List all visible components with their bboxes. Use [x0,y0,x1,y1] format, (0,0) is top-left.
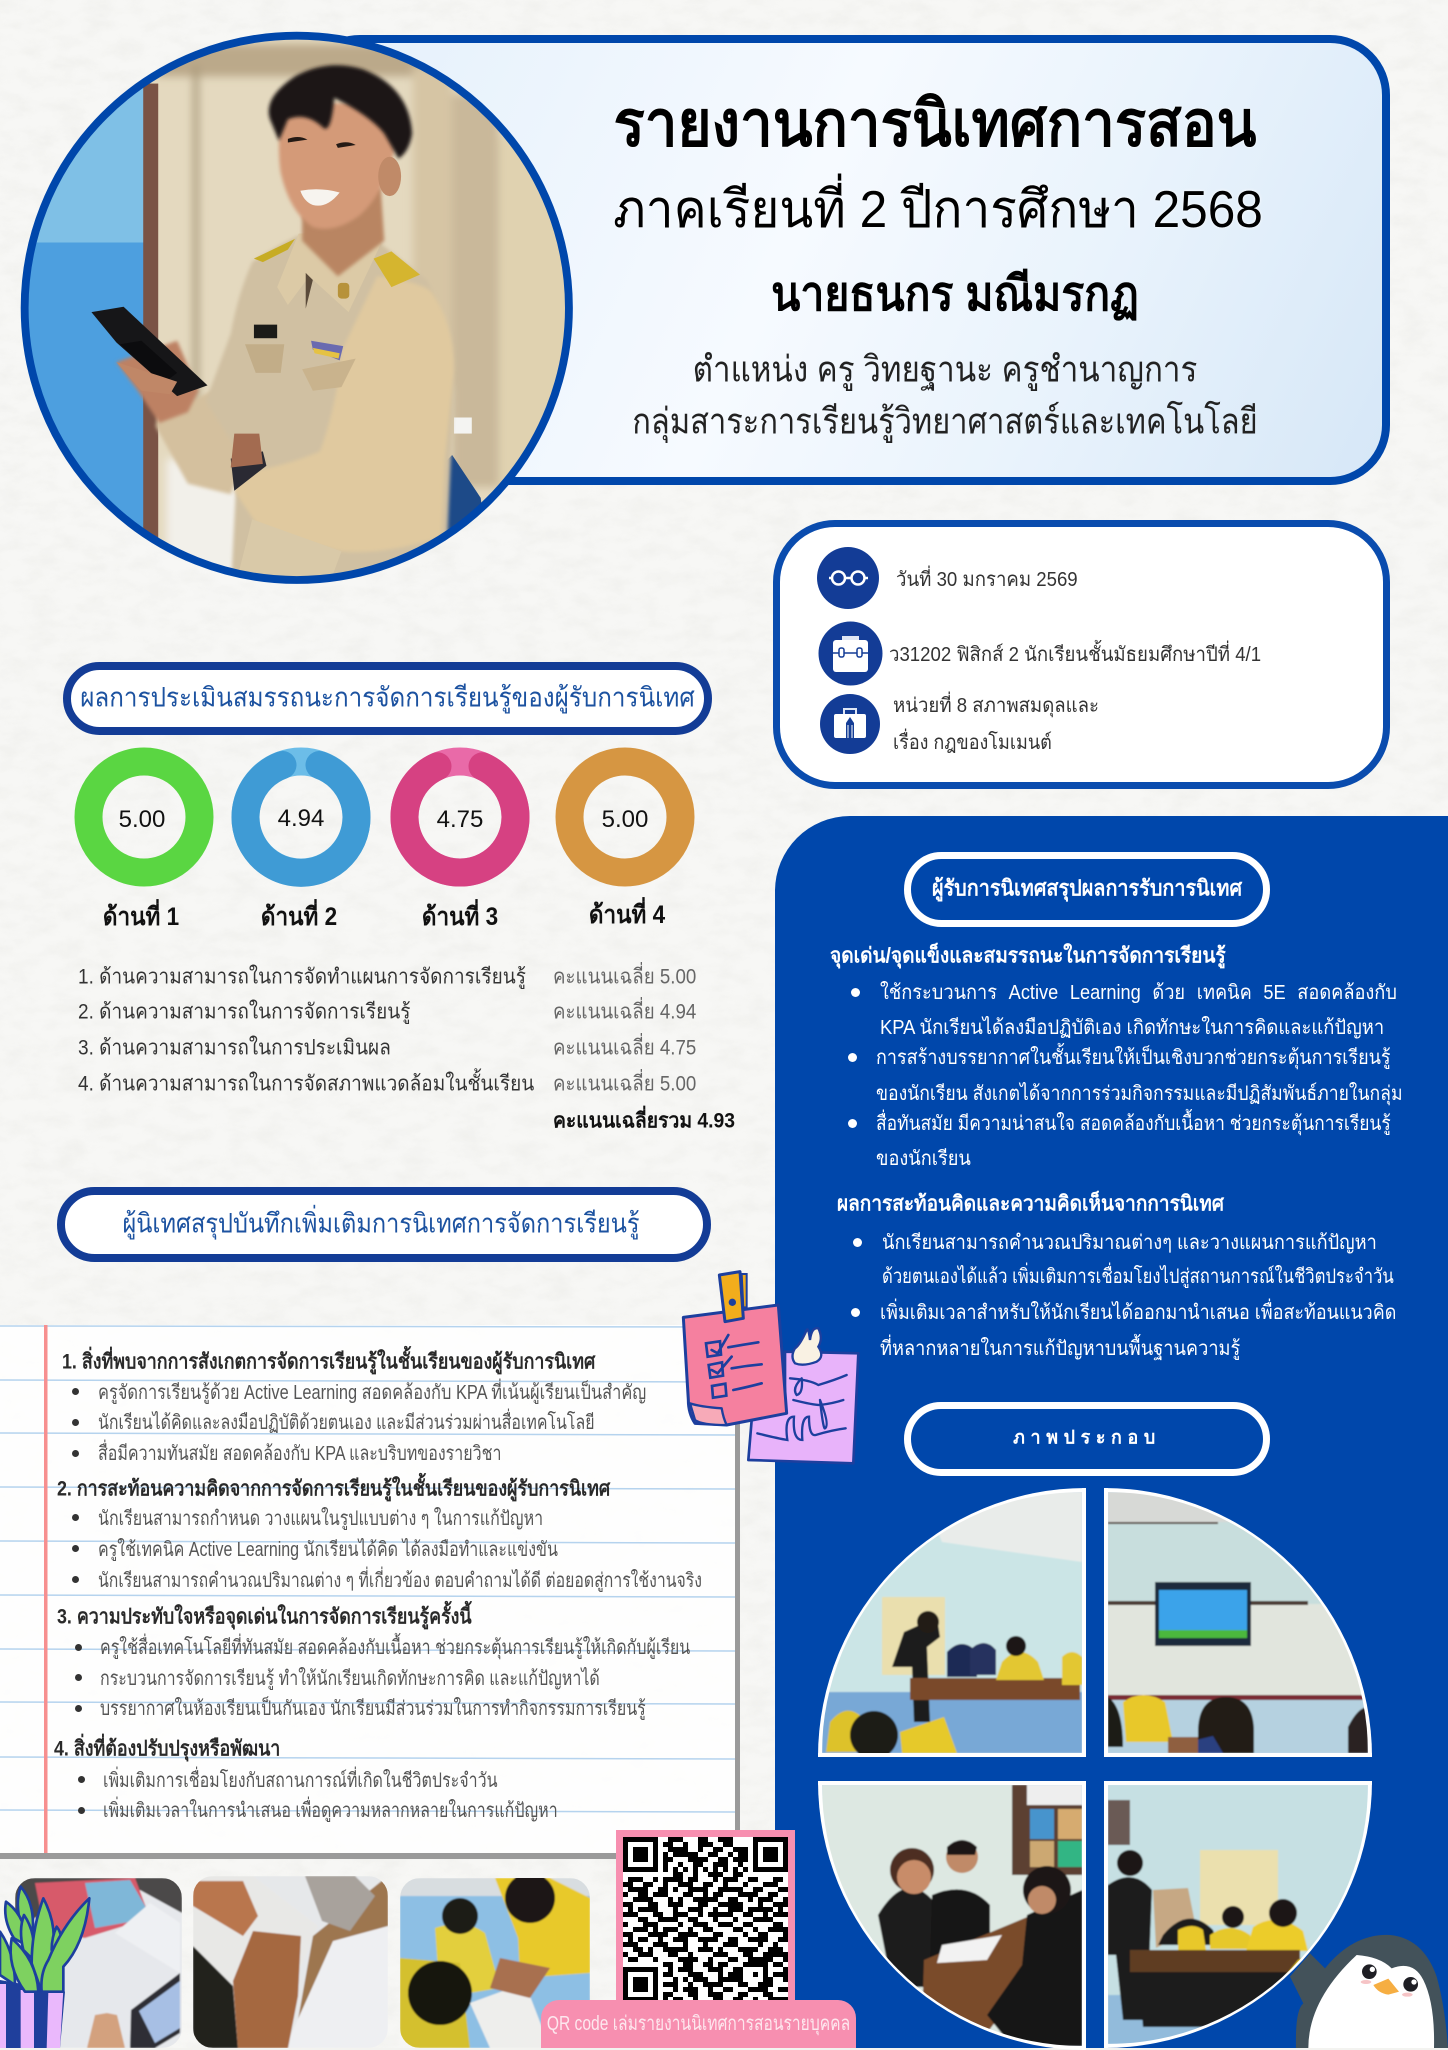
strengths heading: จุดเด่น/จุดแข็งและสมรรถนะในการจัดการเรียนรู้ [830,944,1226,967]
hair [269,65,412,159]
donut label 3: ด้านที่ 3 [422,903,498,931]
section: strengths: KPA นักเรียนได้ลงมือปฏิบัติเอง เกิดทักษะในการคิดและแก้ปัญหา [880,1017,1384,1039]
panel: notebook: นักเรียนสามารถกำหนด วางแผนในรูปแบบต่าง ๆ ในการแก้ปัญหา [98,1508,543,1530]
score list: 2. ด้านความสามารถในการจัดการเรียนรู้ [78,1000,410,1023]
section: reflection: ด้วยตนเองได้แล้ว เพิ่มเติมการเชื่อมโยงไปสู่สถานการณ์ในชีวิตประจำวัน [882,1266,1394,1288]
info: date: วันที่ 30 มกราคม 2569 [896,569,1078,591]
pink note [683,1305,787,1425]
score list: คะแนนเฉลี่ย 5.00 [553,1072,696,1095]
photo: student writing [193,1876,388,2048]
donut charts: 5.00 [602,806,648,833]
icon: penguin [1280,1920,1448,2048]
heading: supervisor notes: ผู้นิเทศสรุปบันทึกเพิ่มเติมการนิเทศการจัดการเรียนรู้ [122,1208,640,1238]
donut charts [74,748,694,887]
score list: 4. ด้านความสามารถในการจัดสภาพแวดล้อมในชั้นเรียน [78,1072,534,1095]
teacher department: กลุ่มสาระการเรียนรู้วิทยาศาสตร์และเทคโนโลยี [632,401,1258,442]
teacher name: นายธนกร มณีมรกฏ [771,268,1139,321]
QR caption: QR code เล่มรายงานนิเทศการสอนรายบุคคล [547,2013,850,2035]
section: strengths: ของนักเรียน สังเกตได้จากการร่วมกิจกรรมและมีปฏิสัมพันธ์ภายในกลุ่ม [876,1083,1403,1105]
neck [302,187,384,276]
heading: competency evaluation [63,662,712,735]
icon: briefcase [818,622,882,686]
collar [277,230,381,312]
QR caption [541,2000,856,2048]
photo: worksheet and phone [15,1878,182,2048]
score list: คะแนนเฉลี่ยรวม 4.93 [553,1109,735,1132]
hand and phone [116,341,199,423]
score list: 3. ด้านความสามารถในการประเมินผล [78,1036,391,1059]
score list: 1. ด้านความสามารถในการจัดทำแผนการจัดการเรียนรู้ [78,965,526,988]
section: strengths [820,940,1420,1180]
info: course: ว31202 ฟิสิกส์ 2 นักเรียนชั้นมัธยมศึกษาปีที่ 4/1 [889,644,1261,666]
panel: notebook: ครูใช้เทคนิค Active Learning นักเรียนได้คิด ได้ลงมือทำและแข่งขัน [98,1539,558,1561]
section: reflection: ที่หลากหลายในการแก้ปัญหาบนพื้นฐานความรู้ [880,1338,1240,1360]
heading: competency evaluation: ผลการประเมินสมรรถนะการจัดการเรียนรู้ของผู้รับการนิเทศ [80,682,695,712]
section: reflection: นักเรียนสามารถคำนวณปริมาณต่างๆ และวางแผนการแก้ปัญหา [882,1232,1377,1254]
heading: illustrations [904,1402,1270,1476]
section: strengths: ของนักเรียน [876,1148,971,1170]
teacher position: ตำแหน่ง ครู วิทยฐานะ ครูชำนาญการ [693,349,1197,390]
photo: classroom desks [818,1488,1086,1757]
score list: คะแนนเฉลี่ย 5.00 [553,965,696,988]
notes section 1: 1. สิ่งที่พบจากการสังเกตการจัดการเรียนรู้ในชั้นเรียนของผู้รับการนิเทศ [62,1350,595,1373]
notes section 4: 4. สิ่งที่ต้องปรับปรุงหรือพัฒนา [54,1737,280,1760]
donut label 4: ด้านที่ 4 [589,901,665,929]
photo: classroom screen [1104,1488,1372,1757]
score list [78,962,735,1132]
donut label 2: ด้านที่ 2 [261,903,337,931]
info: topic: เรื่อง กฎของโมเมนต์ [893,732,1052,754]
panel: notebook [0,1325,740,1859]
portrait photo [20,32,573,584]
title: รายงานการนิเทศการสอน [614,87,1256,159]
purple note [748,1352,858,1463]
heading: illustrations: ภาพประกอบ [1013,1428,1161,1449]
reflection heading: ผลการสะท้อนคิดและความคิดเห็นจากการนิเทศ [837,1192,1224,1215]
panel: lesson info [773,520,1390,789]
heading: supervisor notes [57,1187,711,1262]
notes section 3: 3. ความประทับใจหรือจุดเด่นในการจัดการเรียนรู้ครั้งนี้ [57,1605,472,1628]
pockets [245,344,284,373]
sticker: checklist note and doodle note [670,1260,870,1480]
panel: blue supervisee summary [775,816,1448,2048]
shirt [206,235,454,590]
wrist [231,451,266,491]
panel: notebook: เพิ่มเติมการเชื่อมโยงกับสถานการณ์ที่เกิดในชีวิตประจำวัน [103,1770,498,1792]
QR code [616,1830,795,2048]
section: reflection [820,1190,1420,1370]
photo: students and supervisor [1104,1781,1372,2048]
donut charts: 4.75 [437,806,483,833]
panel: notebook: สื่อมีความทันสมัย สอดคล้องกับ KPA และบริบทของรายวิชา [98,1443,501,1465]
photo: group work [400,1878,590,2048]
icon: glasses [817,547,879,609]
heading: supervisee summary [904,852,1270,927]
section: strengths: สื่อทันสมัย มีความน่าสนใจ สอดคล้องกับเนื้อหา ช่วยกระตุ้นการเรียนรู้ [876,1113,1391,1135]
score list: คะแนนเฉลี่ย 4.75 [553,1036,696,1059]
panel: notebook: ครูใช้สื่อเทคโนโลยีที่ทันสมัย สอดคล้องกับเนื้อหา ช่วยกระตุ้นการเรียนรู้ให้เกิดกับผู้เรียน [100,1637,690,1659]
panel: notebook: กระบวนการจัดการเรียนรู้ ทำให้นักเรียนเกิดทักษะการคิด และแก้ปัญหาได้ [100,1668,600,1690]
panel: notebook: เพิ่มเติมเวลาในการนำเสนอ เพื่อดูความหลากหลายในการแก้ปัญหา [103,1800,558,1822]
section: strengths: ใช้กระบวนการ Active Learning ด้วย เทคนิค 5E สอดคล้องกับ [880,982,1397,1004]
head [279,101,395,229]
score list: คะแนนเฉลี่ย 4.94 [553,1000,696,1023]
panel: notebook: นักเรียนสามารถคำนวณปริมาณต่าง ๆ ที่เกี่ยวข้อง ตอบคำถามได้ดี ต่อยอดสู่การใช้งานจริง [98,1570,702,1592]
info: unit: หน่วยที่ 8 สภาพสมดุลและ [893,695,1099,717]
donut charts: 5.00 [119,806,165,833]
donut label 1: ด้านที่ 1 [103,903,179,931]
panel: header [300,35,1390,485]
donut charts: 4.94 [278,805,324,832]
section: strengths: การสร้างบรรยากาศในชั้นเรียนให้เป็นเชิงบวกช่วยกระตุ้นการเรียนรู้ [876,1047,1391,1069]
icon: pencil case [820,694,880,754]
subtitle: semester: ภาคเรียนที่ 2 ปีการศึกษา 2568 [613,181,1263,239]
icon: plant pot [0,1860,100,2048]
section: reflection: เพิ่มเติมเวลาสำหรับให้นักเรียนได้ออกมานำเสนอ เพื่อสะท้อนแนวคิด [880,1302,1396,1324]
heading: supervisee summary: ผู้รับการนิเทศสรุปผลการรับการนิเทศ [932,876,1242,901]
panel: notebook: นักเรียนได้คิดและลงมือปฏิบัติด้วยตนเอง และมีส่วนร่วมผ่านสื่อเทคโนโลยี [98,1412,595,1434]
panel: notebook: ครูจัดการเรียนรู้ด้วย Active Learning สอดคล้องกับ KPA ที่เน้นผู้เรียนเป็นสำคัญ [98,1382,646,1404]
panel: notebook: บรรยากาศในห้องเรียนเป็นกันเอง นักเรียนมีส่วนร่วมในการทำกิจกรรมการเรียนรู้ [100,1698,646,1720]
arm far [154,392,234,496]
photo: supervisors at table [818,1781,1086,2050]
notes section 2: 2. การสะท้อนความคิดจากการจัดการเรียนรู้ในชั้นเรียนของผู้รับการนิเทศ [57,1477,610,1500]
